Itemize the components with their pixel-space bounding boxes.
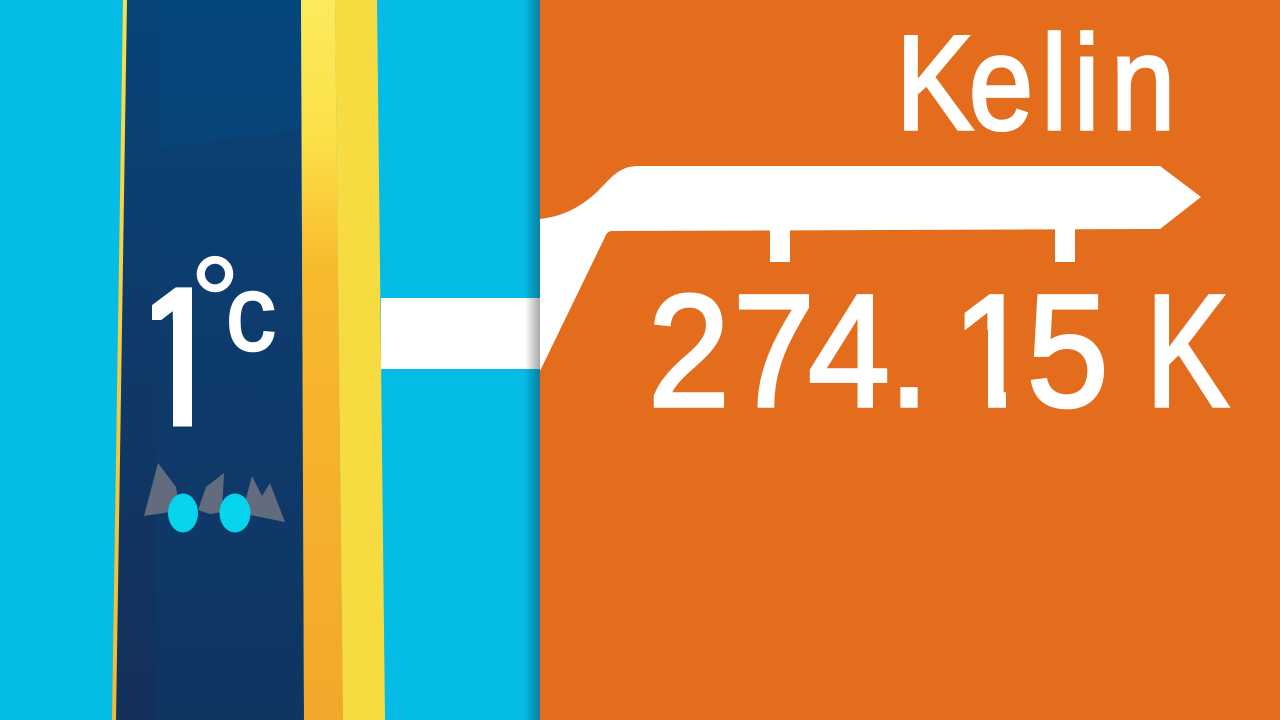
thermometer column	[112, 0, 385, 720]
orange-yellow strip	[301, 0, 343, 720]
yellow strip	[335, 0, 385, 720]
connector bar	[381, 298, 540, 369]
navy column	[116, 0, 304, 720]
thin yellow edge	[112, 0, 128, 720]
Celsius label: 1°C: 1	[130, 247, 230, 466]
heading: Kelin: Kelin	[896, 9, 1175, 158]
icon: face with grey shapes and cyan eyes	[144, 463, 285, 532]
Celsius label: 1°C: °	[190, 232, 240, 371]
panel: orange Kelvin	[540, 0, 1280, 720]
value: 274. 15 K: 274. 15	[648, 261, 1109, 440]
arrow with ticks	[540, 166, 1201, 371]
lighter upper panel	[160, 0, 300, 148]
darker lower-left band	[117, 200, 160, 720]
Celsius label: 1°C	[152, 256, 275, 426]
divider shadow	[524, 0, 540, 720]
value: 274. 15 K: K	[1146, 262, 1229, 441]
Celsius label: 1°C: c	[226, 252, 276, 373]
value: 274. 15 K	[654, 292, 1230, 410]
background: blue panel	[0, 0, 540, 720]
